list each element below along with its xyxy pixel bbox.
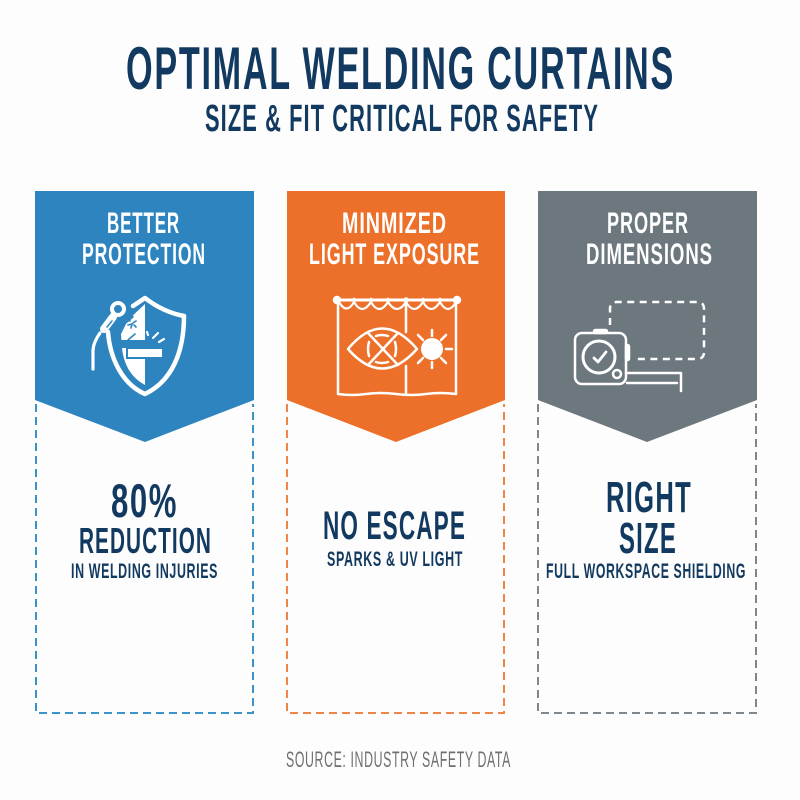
stat: no escape: [323, 504, 466, 571]
stat: no escape: SPARKS & UV LIGHT: [327, 548, 463, 571]
heading: [82, 207, 206, 271]
panel: proper dimensions: [538, 191, 757, 713]
stat: right size: [546, 473, 746, 583]
heading: MINMIZED: [342, 207, 447, 240]
heading: LIGHT EXPOSURE: [309, 238, 480, 271]
source note: SOURCE: INDUSTRY SAFETY DATA: [286, 747, 511, 772]
heading: [586, 207, 713, 271]
banner: [538, 191, 757, 442]
banner: [35, 191, 254, 442]
stat: 80% reduction: IN WELDING INJURIES: [71, 560, 218, 583]
icon: curtain with eye and sun: [334, 297, 460, 395]
panel: better protection: [35, 191, 254, 713]
banner: [287, 191, 505, 442]
heading: [309, 207, 480, 271]
dashed outline: [538, 404, 756, 713]
stat: no escape: NO ESCAPE: [323, 504, 466, 548]
heading: BETTER: [107, 207, 180, 240]
stat: 80% reduction: REDUCTION: [79, 520, 212, 561]
icon: tape measure: [575, 302, 704, 391]
stat: 80% reduction: [71, 474, 218, 583]
heading: PROTECTION: [82, 238, 206, 271]
stat: right size: RIGHT: [606, 473, 692, 522]
heading: DIMENSIONS: [586, 238, 713, 271]
icon: welding torch and shield: [93, 298, 184, 394]
heading: PROPER: [607, 207, 689, 240]
dashed outline: [287, 404, 504, 713]
dashed outline: [36, 404, 253, 713]
stat: 80% reduction: 80%: [111, 474, 178, 527]
panel: minimized light exposure: [287, 191, 505, 713]
stat: right size: SIZE: [619, 514, 677, 563]
